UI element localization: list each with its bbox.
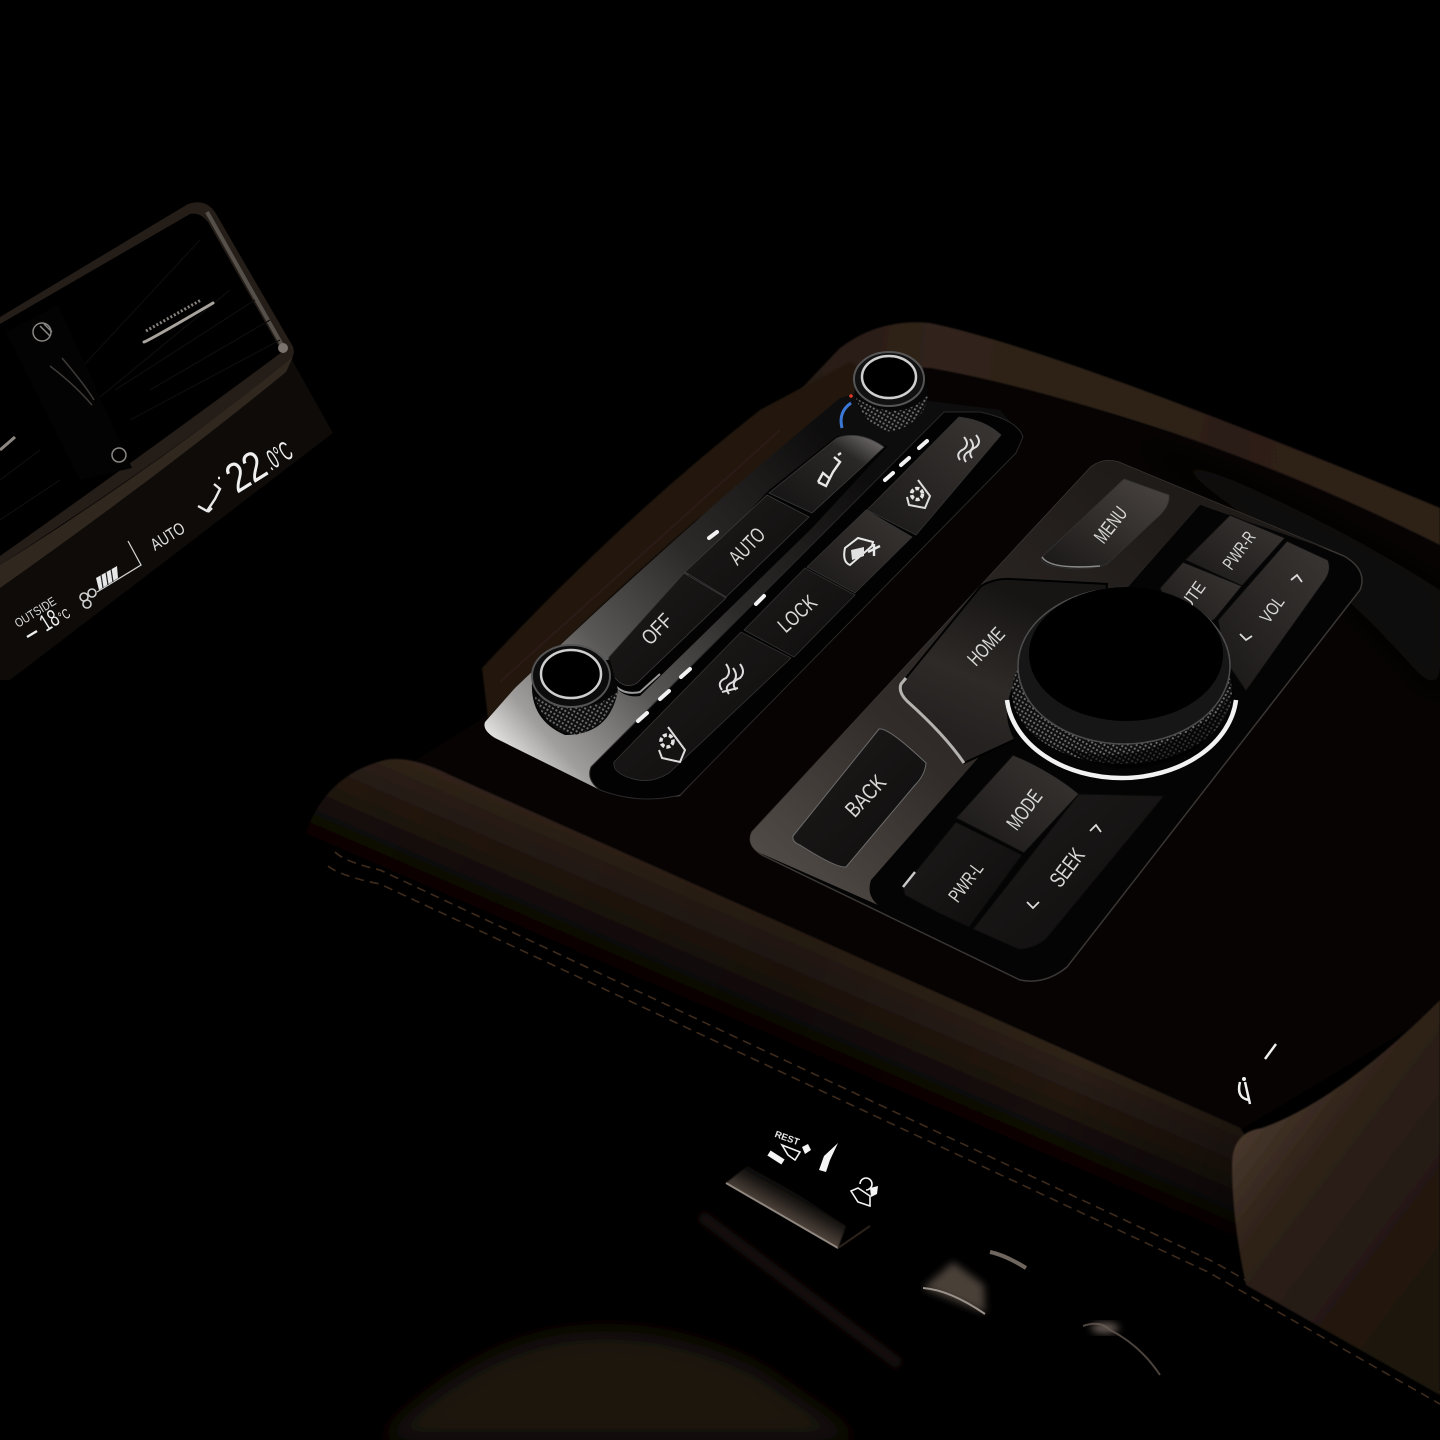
seat controls: round switches: [700, 1215, 1160, 1375]
temperature scale: [841, 394, 853, 428]
icon: airflow direction: [198, 478, 220, 512]
button: MUTE: [1160, 562, 1242, 640]
button: rear fan and seat right: [867, 417, 1001, 535]
readout: outside temperature: °C: [55, 605, 73, 625]
button: SEEK: [973, 794, 1164, 949]
readout: outside temperature: 18: [35, 605, 64, 637]
button: AUTO: AUTO: [724, 523, 770, 570]
knob: lower left climate: [532, 645, 618, 735]
silver plate: [484, 392, 1023, 798]
button: LOCK: [744, 568, 855, 657]
display housing: [0, 360, 333, 680]
readout: outside temperature: [12, 594, 73, 637]
center vent control: [6, 305, 132, 480]
panel: right media control plate: [750, 461, 1362, 981]
armrest: wood panel and top leather band: [400, 322, 1440, 1130]
slat slider: [144, 303, 213, 342]
indicator LEDs: [638, 441, 927, 721]
button: BACK: [793, 729, 926, 867]
button: PWR-L: PWR-L: [945, 859, 988, 907]
button: MODE: MODE: [1002, 786, 1047, 835]
vent frame: [0, 202, 294, 565]
readout: 22.0°C: 22: [217, 441, 275, 502]
button: SEEK: SEEK: [1044, 843, 1090, 892]
button: rear fan and seat left: [614, 632, 791, 781]
button: MENU: [1042, 479, 1169, 569]
readout: AUTO: AUTO: [147, 519, 188, 554]
button: MUTE: MUTE: [1169, 578, 1210, 623]
button: OFF: OFF: [637, 609, 677, 650]
armrest: front leather bolster with stitching: [305, 759, 1440, 1404]
seat controls: REST switch: [726, 1163, 870, 1248]
button: VOL: [1218, 541, 1329, 691]
button: HOME: HOME: [964, 623, 1010, 670]
button: rear curtain: [807, 510, 912, 593]
button: LOCK: LOCK: [774, 591, 822, 637]
seat cushion leather at the bottom: [380, 1332, 860, 1440]
panel: left climate control plate: [484, 352, 1023, 799]
button: VOL: VOL: [1256, 592, 1288, 627]
upper row tray shadow: [604, 436, 888, 696]
icon: wireless charging indicator: [1239, 1044, 1276, 1104]
black inner tray: [870, 505, 1352, 971]
black button tray: [590, 412, 1023, 799]
readout: outside temperature: OUTSIDE: [12, 594, 59, 631]
button: HOME: [900, 579, 1107, 763]
stitching lines: [328, 852, 1440, 1404]
panel: rear air vent and climate display: .0°C: [258, 436, 298, 476]
label: REST and seat icons: [769, 1129, 878, 1206]
button: PWR-R: PWR-R: [1219, 528, 1260, 573]
button: MODE: [956, 755, 1079, 853]
button: PWR-R: [1185, 515, 1285, 586]
knob: large rotary controller: [1007, 587, 1236, 791]
fan speed bars: [80, 541, 141, 608]
button: OFF: [608, 573, 726, 686]
knob: upper right climate: [854, 352, 928, 432]
button: MENU: MENU: [1090, 503, 1132, 548]
button: BACK: BACK: [840, 770, 891, 822]
right side leather armrest: [1232, 1000, 1440, 1395]
label: REST and seat icons: REST: [773, 1129, 801, 1148]
button: PWR-L: [903, 822, 1022, 927]
vent slats: [0, 240, 280, 520]
button: defrost airflow: [769, 435, 884, 513]
panel: rear air vent and climate display: [0, 202, 333, 680]
button: AUTO: [685, 495, 809, 597]
